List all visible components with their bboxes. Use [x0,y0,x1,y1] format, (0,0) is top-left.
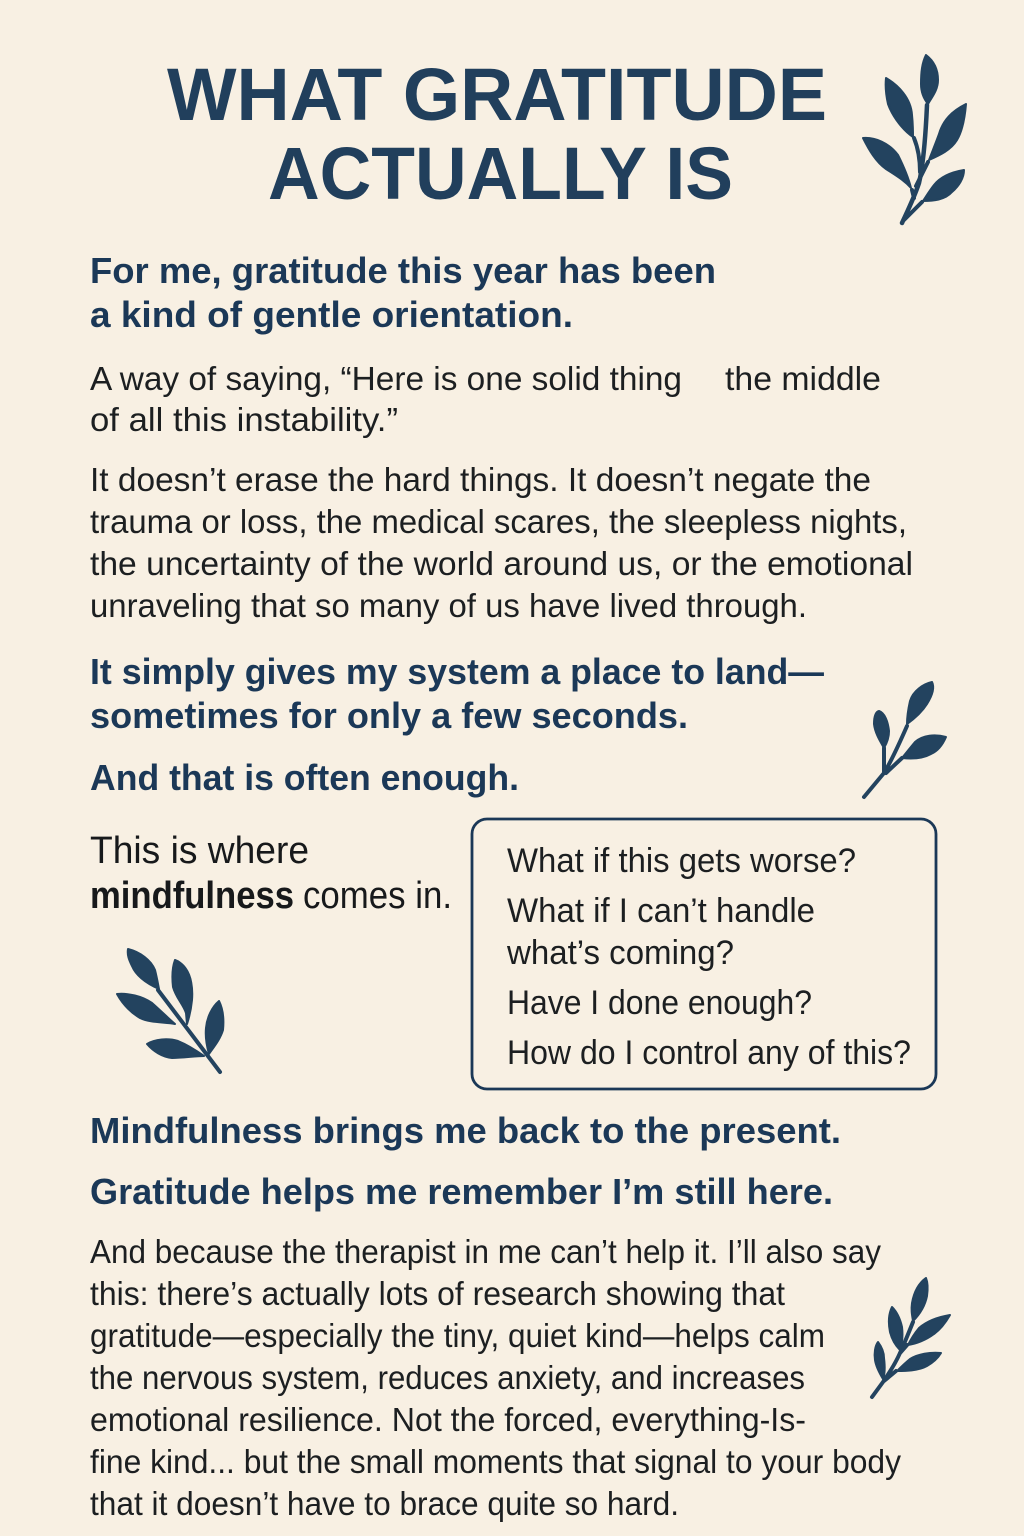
icon: middle right leaf sprig [864,682,946,797]
heading: a place to land [90,651,824,798]
text block: research on gratitude: gratitude—especially the tiny, quiet kind—helps calm [90,1317,825,1354]
text block: one solid thing [90,360,881,438]
question: gets worse: What if this gets worse? [507,842,856,880]
text block: mindfulness comes in: mindfulness [90,875,294,917]
title: WHAT GRATITUDE [167,53,827,136]
heading: present and still here: Gratitude helps me remember I’m still here. [90,1171,833,1212]
heading: a place to land: sometimes for only a few seconds. [90,695,688,736]
text block: research on gratitude: this: there’s actually lots of research showing that [90,1275,785,1312]
text block: mindfulness comes in [90,830,452,917]
heading: gentle orientation [90,250,716,335]
heading: present and still here: Mindfulness brings me back to the present. [90,1110,841,1151]
heading: present and still here [90,1110,841,1212]
text block: hard things: trauma or loss, the medical scares, the sleepless nights, [90,503,907,540]
text block: research on gratitude: fine kind... but the small moments that signal to your body [90,1443,901,1480]
heading: gentle orientation: a kind of gentle orientation. [90,294,573,335]
text block: research on gratitude: the nervous system, reduces anxiety, and increases [90,1359,805,1396]
question: can't handle: what’s coming? [506,934,734,972]
text block: mindfulness comes in: This is where [90,830,309,872]
heading: a place to land: And that is often enough. [90,757,519,798]
panel: worry questions [472,819,936,1089]
text block: research on gratitude [90,1233,901,1522]
text block: one solid thing: of all this instability.” [90,401,398,438]
question: done enough: Have I done enough? [507,984,812,1022]
text block: hard things: unraveling that so many of us have lived through. [90,587,807,624]
icon: bottom right leaf sprig [872,1278,950,1397]
text block: one solid thing: A way of saying, “Here is one solid thing [90,360,682,397]
question: control: How do I control any of this? [507,1034,911,1072]
text block: hard things: the uncertainty of the world around us, or the emotional [90,545,913,582]
question: can't handle: What if I can’t handle [507,892,815,930]
heading: gentle orientation: For me, gratitude this year has been [90,250,716,291]
icon: lower left leaf sprig [117,949,223,1072]
text block: one solid thing: the middle [725,360,881,397]
title [167,53,827,215]
text block: research on gratitude: emotional resilience. Not the forced, everything-Is- [90,1401,806,1438]
title: ACTUALLY IS [268,132,733,215]
heading: a place to land: It simply gives my system a place to land— [90,651,824,692]
text block: hard things: It doesn’t erase the hard things. It doesn’t negate the [90,461,871,498]
text block: research on gratitude: And because the therapist in me can’t help it. I’ll also say [90,1233,881,1270]
text block: mindfulness comes in: comes in. [303,875,452,917]
text block: hard things [90,461,913,624]
icon: top right leaf sprig [863,55,966,223]
question: can't handle [506,892,815,972]
text block: research on gratitude: that it doesn’t have to brace quite so hard. [90,1485,679,1522]
